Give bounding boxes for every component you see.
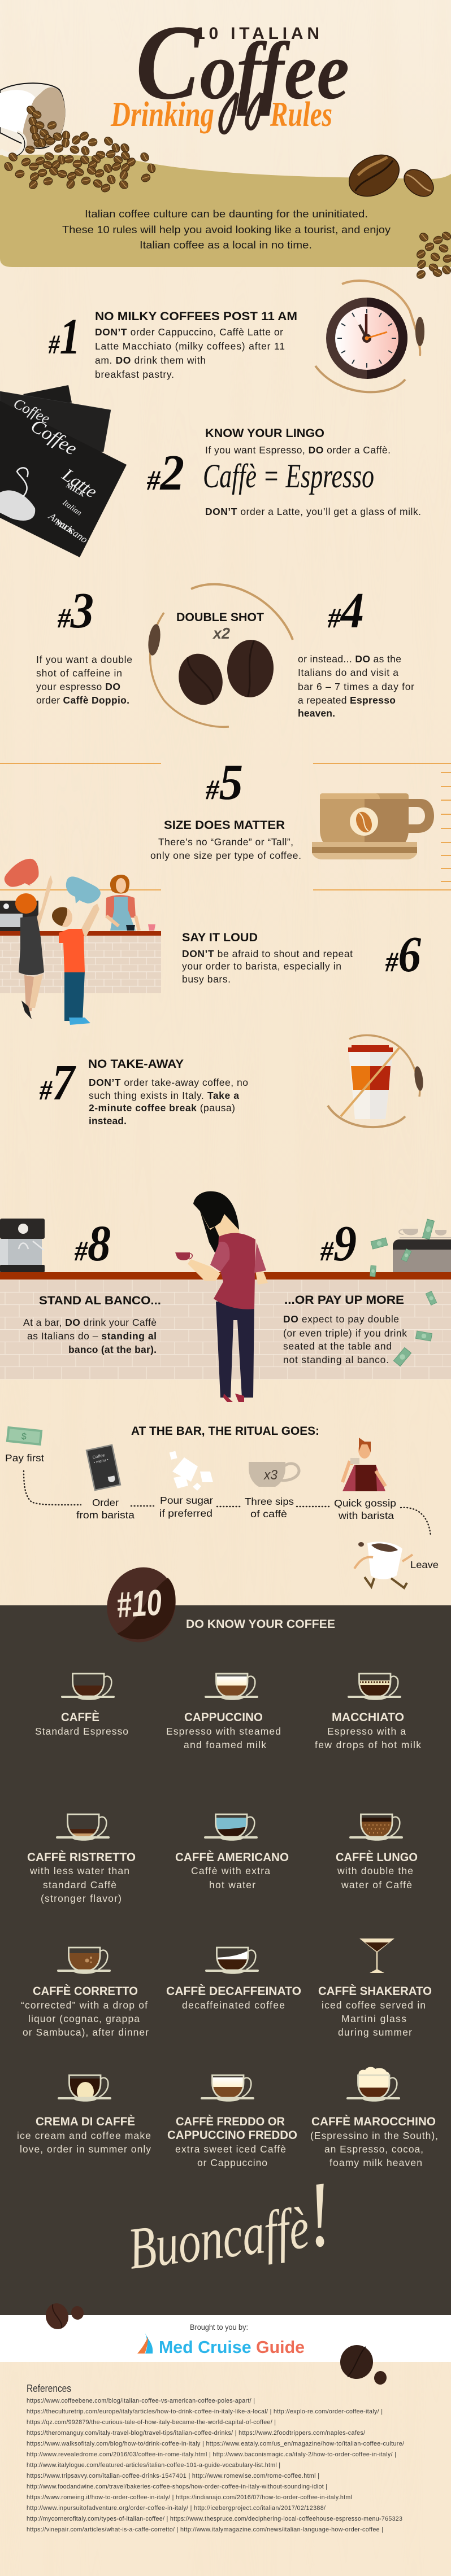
label x2: x2 — [212, 625, 230, 642]
body rule 8: banco (at the bar). — [68, 1344, 157, 1355]
closing script: Buoncaffe: Buoncaffè! — [121, 2162, 337, 2289]
item: decaffeinato — [166, 1948, 301, 2011]
item: corretto — [21, 1948, 149, 2038]
item: shakerato — [318, 1938, 432, 2038]
number 7: #7 — [39, 1055, 76, 1111]
step: three sips — [245, 1462, 299, 1520]
item: americano: hot water — [209, 1879, 255, 1890]
logo: sail — [137, 2332, 153, 2354]
bar counter with bricks — [0, 931, 161, 993]
references list: https://theculturetrip.com/europe/italy/articles/how-to-drink-coffee-in-italy-like-a-local/ | http://explo-re.com/order-coffee-italy/ | — [27, 2408, 383, 2415]
icon: two big roasted beans — [342, 147, 439, 204]
icon: bean right — [226, 639, 275, 698]
heading rule 6: SAY IT LOUD — [182, 931, 258, 944]
body rule 4: or instead... DO as the — [298, 653, 401, 665]
item: lungo: with double the — [337, 1865, 413, 1876]
body rule 6 — [182, 948, 353, 985]
step: order: Coffee — [92, 1452, 105, 1460]
references — [27, 2383, 404, 2533]
item: macchiato: few drops of hot milk — [315, 1739, 421, 1750]
body rule 7: DON’T order take-away coffee, no — [89, 1077, 248, 1088]
illustration: woman at counter — [175, 1191, 268, 1402]
item: cappuccino: Espresso with steamed — [166, 1726, 281, 1737]
item: marocchino: foamy milk heaven — [329, 2157, 422, 2168]
step: pay first: Pay first — [5, 1452, 44, 1464]
icon: chalkboard coffee cards: Coffee — [11, 395, 53, 427]
references list: https://qz.com/992879/the-curious-tale-of-how-italy-became-the-world-capital-of-coffee/ | — [27, 2419, 276, 2426]
body rule 1: am. DO drink them with — [95, 355, 206, 366]
heading rule 5: SIZE DOES MATTER — [164, 818, 285, 832]
step: three sips: Three sips — [245, 1496, 294, 1507]
rule 3: double shot text — [36, 583, 132, 706]
body rule 3 — [36, 654, 132, 706]
item: marocchino: (Espressino in the South), — [310, 2130, 438, 2141]
item: shakerato: Martini glass — [341, 2013, 406, 2024]
icon: machine with cups and money — [370, 1219, 451, 1366]
title: 10 ITALIAN — [196, 24, 319, 43]
icon: chalkboard coffee cards: Italian — [60, 498, 83, 518]
heading rule 7: NO TAKE-AWAY — [88, 1057, 184, 1071]
body rule 1: breakfast pastry. — [95, 369, 174, 380]
item: caffe: CAFFÈ — [61, 1710, 99, 1724]
rule 1: no milky coffees — [48, 309, 297, 380]
step: pay first — [5, 1426, 44, 1464]
body rule 7: such thing exists in Italy. Take a — [89, 1090, 239, 1101]
body rule 9: DO expect to pay double — [283, 1313, 399, 1325]
step: pay first: $ — [21, 1432, 27, 1442]
rule 4: espresso heaven — [298, 583, 414, 719]
item: lungo: CAFFÈ LUNGO — [336, 1850, 418, 1864]
icon: chalkboard coffee cards: MILK — [54, 518, 76, 536]
item: crema di caffe — [17, 2075, 151, 2155]
icon: sized mug — [312, 793, 434, 859]
step: sugar: if preferred — [159, 1508, 213, 1519]
item: americano: CAFFÈ AMERICANO — [175, 1850, 289, 1864]
body rule 4 — [298, 653, 414, 719]
item: corretto: CAFFÈ CORRETTO — [33, 1984, 138, 1998]
speech bubble blue — [66, 876, 101, 903]
number 8: #8 — [74, 1216, 111, 1272]
body rule 7: 2-minute coffee break (pausa) — [89, 1102, 235, 1114]
item: corretto: liquor (cognac, grappa — [28, 2013, 140, 2024]
references list: https://www.walksofitaly.com/blog/how-to/drink-coffee-in-italy | https://www.eataly.com/us_en/magazine/how-to/italian-coffee-culture/ — [27, 2440, 404, 2447]
ritual heading: AT THE BAR, THE RITUAL GOES: — [131, 1424, 319, 1438]
body rule 5: only one size per type of coffee. — [150, 850, 301, 861]
icon: coffee beans spilling — [3, 104, 157, 194]
item: macchiato: MACCHIATO — [332, 1710, 404, 1724]
item: corretto: “corrected” with a drop of — [21, 1999, 148, 2011]
body rule 8: At a bar, DO drink your Caffè — [23, 1317, 157, 1328]
references list: https://theromanguy.com/italy-travel-blog/travel-tips/italian-coffee-drinks/ | https://www.2foodtrippers.com/naples-cafes/ — [27, 2430, 365, 2437]
icon: crossed take-away cup — [328, 1035, 424, 1127]
rule 8: stand al banco — [23, 1216, 161, 1355]
heading rule 9: ...OR PAY UP MORE — [284, 1293, 404, 1307]
step: quick gossip: Quick gossip — [334, 1497, 396, 1509]
body rule 3: shot of caffeine in — [36, 667, 122, 679]
rule 6: say it loud — [182, 927, 421, 985]
body rule 8: as Italians do – standing al — [27, 1330, 157, 1342]
references list: https://vinepair.com/articles/what-is-a-caffe-corretto/ | http://www.italymagazine.com/news/italian-language-how-order-coffee | — [27, 2526, 383, 2533]
heading rule 8: STAND AL BANCO... — [39, 1294, 161, 1307]
step: order: from barista — [76, 1509, 135, 1521]
icon: beans at band top — [44, 2302, 85, 2331]
item: marocchino: an Espresso, cocoa, — [324, 2143, 423, 2155]
item: marocchino — [310, 2067, 438, 2168]
item: cappuccino: and foamed milk — [184, 1739, 266, 1750]
item: caffe freddo: extra sweet iced Caffè — [175, 2143, 286, 2155]
barista — [106, 875, 155, 931]
body rule 1: DON’T order Cappuccino, Caffè Latte or — [95, 326, 283, 338]
icon: chalkboard coffee cards — [0, 385, 127, 557]
number 3: #3 — [57, 583, 94, 639]
panel: sponsor band — [0, 2315, 451, 2362]
panel: know your coffee — [0, 1605, 451, 2315]
logo: wordmark: Med Cruise Guide — [159, 2337, 305, 2357]
item: crema di caffe: CREMA DI CAFFÈ — [36, 2114, 135, 2128]
body rule 1: Latte Macchiato (milky coffees) after 11 — [95, 340, 285, 352]
body rule 6: DON’T be afraid to shout and repeat — [182, 948, 353, 959]
rule 10 bean and number: #10 — [115, 1582, 163, 1626]
item: americano: Caffè with extra — [191, 1865, 270, 1876]
item: crema di caffe: love, order in summer only — [20, 2143, 151, 2155]
item: lungo: water of Caffè — [341, 1879, 412, 1890]
references list: https://www.coffeebene.com/blog/italian-coffee-vs-american-coffee-poles-apart/ | — [27, 2398, 255, 2404]
item: ristretto: CAFFÈ RISTRETTO — [27, 1850, 136, 1864]
customer woman — [15, 875, 53, 1019]
body rule 4: a repeated Espresso — [298, 695, 396, 706]
step: three sips: x3 — [263, 1468, 278, 1483]
label double shot: DOUBLE SHOT — [176, 610, 264, 624]
references list: http://mycornerofitaly.com/types-of-italian-coffee/ | https://www.thespruce.com/deciphering-local-coffeehouse-espresso-menu-765323 — [27, 2516, 402, 2522]
step: quick gossip — [334, 1438, 396, 1521]
item: lungo — [336, 1814, 418, 1890]
references heading: References — [27, 2383, 71, 2394]
body rule 9 — [283, 1313, 407, 1365]
number 9: #9 — [320, 1216, 357, 1272]
body rule 8 — [23, 1317, 157, 1355]
step: three sips: of caffè — [250, 1508, 287, 1520]
heading rule 2: KNOW YOUR LINGO — [205, 426, 324, 440]
number 4: #4 — [327, 583, 364, 639]
item: shakerato: CAFFÈ SHAKERATO — [318, 1984, 432, 1998]
item: corretto: or Sambuca), after dinner — [23, 2027, 149, 2038]
script formula: Caffè = Espresso — [203, 457, 374, 495]
item: cappuccino — [166, 1673, 281, 1750]
title: Coffee — [136, 3, 349, 122]
double shot beans and stain — [146, 584, 293, 727]
body rule 4: heaven. — [298, 708, 335, 719]
references list: https://www.romeing.it/how-to-order-coffee-in-italy/ | https://indianajo.com/2016/07/how-to-order-coffee-in-italy.html — [27, 2494, 352, 2501]
body rule 9: not standing al banco. — [283, 1354, 389, 1365]
item: caffe: Standard Espresso — [35, 1726, 128, 1737]
references list — [27, 2398, 404, 2533]
item: decaffeinato: CAFFÈ DECAFFEINATO — [166, 1984, 301, 1998]
item: shakerato: during summer — [338, 2027, 412, 2038]
icon: small beans right of intro — [415, 230, 451, 280]
body rule 7: instead. — [89, 1115, 127, 1127]
number 2: #2 — [146, 445, 184, 501]
body rule 7 — [89, 1077, 248, 1127]
body rule 9: seated at the table and — [283, 1341, 392, 1352]
icon: spilled coffee cup — [0, 83, 65, 157]
body rule 6: busy bars. — [182, 973, 231, 985]
speech bubble red — [5, 859, 38, 887]
references list: https://www.tripsavvy.com/italian-coffee-drinks-1547401 | http://www.romewise.com/rome-coffee.html | — [27, 2473, 319, 2479]
step: sugar — [159, 1451, 213, 1519]
heading: do know your coffee: DO KNOW YOUR COFFEE — [186, 1617, 335, 1631]
item: cappuccino: CAPPUCCINO — [184, 1710, 263, 1724]
body rule 4: bar 6 – 7 times a day for — [298, 681, 414, 692]
item: ristretto: with less water than — [29, 1865, 129, 1876]
intro text — [62, 208, 391, 251]
icon: chalkboard coffee cards: Americano — [46, 510, 90, 545]
references list: http://www.revealedrome.com/2016/03/coffee-in-rome-italy.html | http://www.baconismagic.ca/italy-2/how-to-order-coffee-in-italy/ | — [27, 2451, 396, 2458]
item: caffe — [35, 1674, 128, 1737]
icon: chalkboard coffee cards: Coffee — [27, 415, 81, 460]
body rule 1 — [95, 326, 285, 380]
icon: clock with stain — [315, 281, 424, 392]
item: ristretto: standard Caffè — [43, 1879, 116, 1890]
step: leave running cup: Leave — [410, 1559, 439, 1570]
item: marocchino: CAFFÈ MAROCCHINO — [311, 2114, 436, 2128]
rule 7: no take-away — [39, 1055, 248, 1127]
icon: beans at band bottom — [338, 2343, 388, 2385]
number 6: #6 — [385, 927, 421, 983]
step: order: • menu • — [93, 1458, 109, 1465]
item: crema di caffe: ice cream and coffee make — [17, 2130, 151, 2141]
step: order: Order — [92, 1497, 119, 1508]
body rule 6: your order to barista, especially in — [182, 960, 341, 972]
rule 2: know your lingo — [146, 426, 421, 517]
intro text: Italian coffee culture can be daunting for the uninitiated. — [85, 208, 368, 220]
item: decaffeinato: decaffeinated coffee — [182, 1999, 285, 2011]
panel: counter for rules 8 and 9 — [0, 1272, 451, 1379]
rule 5: size does matter — [150, 754, 301, 861]
rule 10 bean and number — [97, 1558, 185, 1651]
body rule 3: If you want a double — [36, 654, 132, 665]
intro text: These 10 rules will help you avoid looking like a tourist, and enjoy — [62, 224, 391, 235]
references list: http://www.italylogue.com/featured-articles/italian-coffee-101-a-guide-vocabulary-list.html | — [27, 2462, 280, 2469]
item: caffe freddo: or Cappuccino — [197, 2157, 267, 2168]
number 5: #5 — [205, 754, 243, 810]
icon: chalkboard coffee cards: MILK — [64, 481, 87, 499]
step: quick gossip: with barista — [338, 1510, 394, 1521]
item: caffe freddo: CAPPUCCINO FREDDO — [167, 2128, 297, 2142]
item: ristretto: (stronger flavor) — [41, 1893, 122, 1904]
step: leave running cup — [354, 1542, 439, 1588]
body rule 5 — [150, 836, 301, 861]
references list: http://www.foodandwine.com/travel/bakeries-coffee-shops/how-order-coffee-in-italy-without-sounding-idiot | — [27, 2483, 327, 2490]
item: americano — [175, 1814, 289, 1890]
coffee machine — [0, 901, 38, 931]
body rule 3: your espresso DO — [36, 681, 120, 692]
intro text: Italian coffee as a local in no time. — [140, 239, 312, 251]
ritual flow dotted path — [24, 1471, 431, 1536]
body rule 3: order Caffè Doppio. — [36, 695, 129, 706]
body rule 2: If you want Espresso, DO order a Caffè. — [205, 444, 391, 456]
step: order — [76, 1445, 135, 1521]
panel: intro band — [0, 155, 451, 267]
body rule 4: Italians do and visit a — [298, 667, 398, 678]
title: Drinking — [110, 95, 214, 134]
icon: espresso machine — [0, 1219, 45, 1272]
brought to you by: Brought to you by: — [190, 2322, 248, 2332]
title: Rules — [270, 95, 332, 134]
body rule 9: (or even triple) if you drink — [283, 1328, 407, 1339]
item: caffe freddo: CAFFÈ FREDDO OR — [176, 2114, 285, 2128]
number 1: #1 — [48, 309, 80, 365]
step: sugar: Pour sugar — [160, 1495, 213, 1506]
illustration: loud bar scene — [0, 859, 161, 1025]
customer man — [52, 903, 99, 1025]
references list: http://www.inpursuitofadventure.org/order-coffee-in-italy/ | http://icebergproject.co/italian/2017/02/12388/ — [27, 2505, 326, 2512]
rule 9: pay up more — [283, 1216, 407, 1365]
icon: chalkboard coffee cards: Latte — [58, 464, 101, 502]
item: macchiato: Espresso with a — [327, 1726, 406, 1737]
heading rule 1: NO MILKY COFFEES POST 11 AM — [95, 309, 297, 323]
warning rule 2: DON’T order a Latte, you’ll get a glass of milk. — [205, 506, 421, 517]
item: caffe freddo — [167, 2075, 297, 2168]
item: shakerato: iced coffee served in — [322, 1999, 426, 2011]
item: macchiato — [315, 1674, 421, 1750]
icon: bean left — [172, 648, 229, 710]
body rule 5: There’s no “Grande” or “Tall”, — [158, 836, 293, 848]
item: ristretto — [27, 1814, 136, 1904]
